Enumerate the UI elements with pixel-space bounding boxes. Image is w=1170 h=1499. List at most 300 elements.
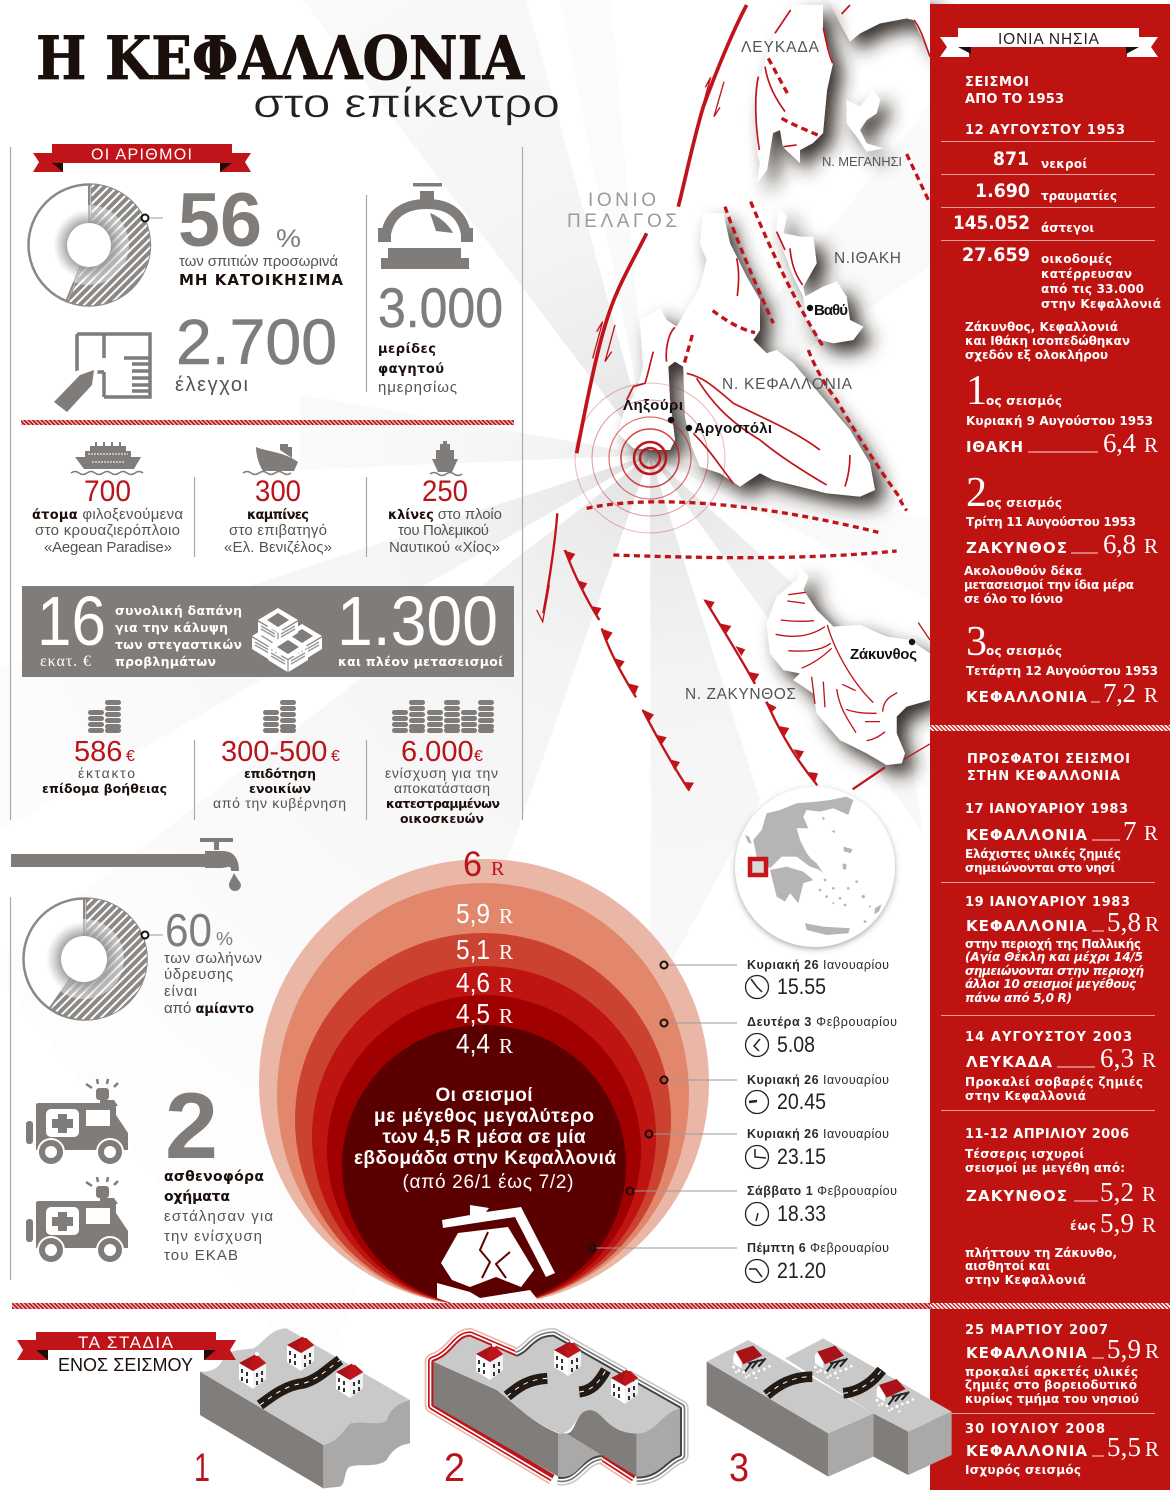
text: earthquakes since 1953: ΑΠΟ ΤΟ 1953 [965,92,1064,107]
chart caption: των 4,5 R μέσα σε μία [382,1127,586,1148]
chart caption: με μέγεθος μεγαλύτερο [374,1106,594,1127]
magnitude labels: R [499,1034,513,1058]
entry: 18.33 [746,1184,897,1226]
marker rings [588,962,668,1252]
road pieces [767,1370,882,1395]
entry: March 25 2007: προκαλεί αρκετές υλικές [965,1365,1138,1379]
entry: March 25 2007: κυρίως τμήμα του νησιού [965,1392,1139,1406]
entry: March 25 2007 [941,1323,1159,1414]
stat: 2700 inspections: 2.700 [176,306,337,378]
epicentre rings [575,383,725,533]
description: αποκατάσταση [394,780,490,796]
text: navy ship: Ναυτικού «Χίος» [389,539,500,556]
first earthquake: 1 [966,368,987,414]
third earthquake: ος σεισμός [986,644,1062,658]
chart caption: εβδομάδα στην Κεφαλλονιά [354,1148,616,1169]
entry: August 14 2003: ΛΕΥΚΑΔΑ [966,1053,1052,1071]
entry: April 2006 [965,1127,1156,1287]
entry: August 14 2003 [941,1030,1156,1110]
ribbon: stages of an earthquake [17,1332,236,1375]
second earthquake [964,470,1158,606]
red side panel [930,4,1170,1490]
third earthquake: 7,2 [1103,678,1136,708]
icon: money bundles [252,608,322,672]
entry: 21.20: Πέμπτη 6 Φεβρουαρίου [747,1241,889,1255]
text: navy ship: του Πολεμικού [398,522,489,539]
entry: April 2006: ΖΑΚΥΝΘΟΣ [966,1187,1067,1205]
ribbon: stages of an earthquake: ΕΝΟΣ ΣΕΙΣΜΟΥ [58,1355,193,1375]
third earthquake: ΚΕΦΑΛΛΟΝΙΑ [966,688,1087,706]
stat: 60%: από αμίαντο [164,1000,254,1017]
left block [707,1340,873,1477]
fault lines north [577,5,930,500]
description: από την κυβέρνηση [213,795,346,811]
magnitude labels: R [499,1004,513,1028]
entry: August 14 2003: R [1142,1048,1156,1072]
stage 1 block [200,1328,410,1488]
entry: August 14 2003: στην Κεφαλλονιά [965,1089,1086,1103]
entry: January 17 1983: Ελάχιστες υλικές ζημιές [965,847,1121,861]
description [385,765,500,826]
stat: 3000 meals: μερίδες [378,342,436,357]
entry: April 2006: έως [1070,1219,1096,1233]
red outline rings [433,1337,635,1477]
entry: January 17 1983: 7 [1123,816,1136,846]
text: total cost: των στεγαστικών [115,637,242,652]
sea label: ΠΕΛΑΓΟΣ [567,211,677,232]
third earthquake: R [1144,683,1158,707]
text: total cost: συνολική δαπάνη [115,603,242,618]
entry: July 30 2008 [965,1422,1159,1477]
text: total cost: προβλημάτων [115,654,216,669]
icon: floor plan and pencil [48,334,150,418]
entry: 15.55 [746,958,889,999]
description: έκτακτο [78,765,135,781]
magnitude labels: 5,1 [456,934,490,965]
icon: collapsed house [437,1205,555,1306]
second earthquake: ΖΑΚΥΝΘΟΣ [966,539,1067,557]
town labels: Ζάκυνθος [850,646,917,663]
entry: January 19 1983: R [1145,912,1159,936]
table: casualties 1953: νεκροί [1041,157,1087,171]
entry: January 19 1983: 5,8 [1107,907,1141,937]
houses [476,1343,503,1380]
town labels: Βαθύ [814,302,848,319]
text: navy ship: κλίνες στο πλοίο [388,506,502,523]
main heading: Η ΚΕΦΑΛΛΟΝΙΑ [36,24,525,94]
hatched divider panel [930,725,1170,731]
entry: July 30 2008: ΚΕΦΑΛΛΟΝΙΑ [966,1442,1087,1460]
thin faults [627,5,930,487]
text: earthquakes since 1953: 12 ΑΥΓΟΥΣΤΟΥ 1953 [965,123,1125,138]
magnitude labels: 5,9 [456,898,490,929]
table: casualties 1953 [941,142,1161,311]
table: casualties 1953: 1.690 [975,180,1030,202]
stat: 3000 meals: φαγητού [378,362,444,377]
donut chart: 60% [24,898,163,1020]
stage 3 block [707,1338,952,1477]
entry: July 30 2008: 5,5 [1107,1432,1141,1462]
entry: July 30 2008: R [1145,1437,1159,1461]
text: destruction: Ζάκυνθος, Κεφαλλονιά [965,320,1118,334]
third earthquake: Τετάρτη 12 Αυγούστου 1953 [966,664,1158,678]
entry: April 2006: 5,9 [1100,1208,1134,1238]
entry: March 25 2007: 5,9 [1107,1334,1141,1364]
text: destruction: σχεδόν εξ ολοκλήρου [965,348,1108,362]
entry: 5.08 [746,1015,897,1057]
text: cruise ship: «Aegean Paradise» [44,539,172,556]
entry: April 2006: στην Κεφαλλονιά [965,1273,1086,1287]
table: casualties 1953: κατέρρευσαν [1041,267,1132,281]
island: Meganisi [847,90,883,152]
table: casualties 1953: στην Κεφαλλονιά [1041,297,1161,311]
stat: 56%: % [276,225,301,253]
right block [785,1338,952,1475]
town labels [623,302,917,663]
entry: 18.33: 18.33 [777,1201,826,1226]
amount: € [474,748,483,765]
description: επιδότηση [244,766,316,781]
road pieces [507,1370,606,1396]
table: casualties 1953: οικοδομές [1041,252,1112,266]
amount: € [331,748,340,765]
stat: 2 ambulances [164,1073,273,1264]
entry: March 25 2007: ζημιές στο βορειοδυτικό [965,1378,1137,1392]
table: casualties 1953: από τις 33.000 [1041,282,1144,296]
table: casualties 1953: άστεγοι [1041,221,1094,235]
text: earthquakes since 1953: ΣΕΙΣΜΟΙ [965,75,1029,90]
island labels: Ν. ΜΕΓΑΝΗΣΙ [822,154,902,169]
table: casualties 1953: τραυματίες [1041,189,1117,203]
entry: January 17 1983: σημειώνονται στο νησί [965,861,1115,875]
second earthquake: Ακολουθούν δέκα [964,564,1082,578]
table: casualties 1953: 871 [993,148,1029,170]
entry: January 17 1983: R [1144,821,1158,845]
panel frame lines [10,147,522,1280]
thrust teeth [563,550,818,791]
locator square [750,859,766,875]
text: cruise ship [32,475,183,556]
entry: April 2006: 11-12 ΑΠΡΙΛΙΟΥ 2006 [965,1127,1129,1142]
icon: ambulance bottom [26,1177,128,1263]
entry: January 17 1983: ΚΕΦΑΛΛΟΝΙΑ [966,826,1087,844]
map labels [567,39,917,703]
entry: 21.20: 21.20 [777,1258,826,1283]
description: οικοσκευών [400,811,484,826]
stat: 60%: ύδρευσης [164,966,233,983]
heading: recent earthquakes [967,752,1130,784]
entry: 15.55: 15.55 [777,974,826,999]
ribbon: numbers: ΟΙ ΑΡΙΘΜΟΙ [91,146,192,164]
stat: 16 million: 16 [37,582,106,660]
ribbon: Ionian islands: ΙΟΝΙΑ ΝΗΣΙΑ [998,31,1100,48]
stat: 2 ambulances: του ΕΚΑΒ [164,1247,238,1264]
amount: 6.000 [401,736,474,768]
stat: 60% [164,904,262,1017]
stage 2 block [433,1337,680,1477]
grey outline rings [517,1337,680,1477]
icon: serving bell [378,183,473,269]
icon: ambulance top [26,1079,128,1165]
amount: € [126,748,135,765]
stat: 56%: ΜΗ ΚΑΤΟΙΚΗΣΙΜΑ [179,271,343,289]
fault segment at Zakynthos [853,767,885,789]
strike-slip arrow [537,585,549,622]
stat: 1300 aftershocks: και πλέον μετασεισμοί [338,654,503,669]
entry: January 19 1983: ΚΕΦΑΛΛΟΝΙΑ [966,917,1087,935]
entry: 5.08: Δευτέρα 3 Φεβρουαρίου [747,1015,897,1029]
text: cruise ship: στο κρουαζιερόπλοιο [35,522,180,539]
nested magnitude chart [259,845,709,1306]
icon: coins [392,700,494,733]
entry: August 14 2003: 14 ΑΥΓΟΥΣΤΟΥ 2003 [965,1030,1132,1045]
sunburst rays [0,0,930,1391]
first earthquake [966,368,1158,458]
stat: 60%: % [216,929,233,949]
description: επίδομα βοήθειας [42,781,167,796]
houses [239,1352,266,1389]
icon: navy ship [430,441,462,476]
text: cruise ship: άτομα φιλοξενούμενα [32,506,183,523]
text: earthquakes since 1953 [965,75,1125,138]
dashed offshore faults [587,500,907,558]
entry: April 2006: Τέσσερις ισχυροί [965,1147,1084,1161]
stat: 3000 meals: ημερησίως [378,379,457,396]
stat: 2 ambulances: εστάλησαν για [164,1208,273,1225]
text: ferry [224,475,332,556]
island: mainland coast [827,0,930,53]
first earthquake: ος σεισμός [986,394,1062,408]
entry: 18.33: Σάββατο 1 Φεβρουαρίου [747,1184,897,1198]
stat: 56%: των σπιτιών προσωρινά [179,253,338,270]
ribbon: Ionian islands [940,28,1158,57]
stage 2 number: 2 [444,1446,465,1490]
magnitude labels: R [499,940,513,964]
text: navy ship: 250 [422,475,468,508]
entry: 20.45: Κυριακή 26 Ιανουαρίου [747,1073,889,1087]
stage 1 number: 1 [194,1446,210,1490]
text: total cost: για την κάλυψη [115,620,228,635]
table: casualties 1953: 145.052 [953,212,1030,234]
stat: 2 ambulances: 2 [165,1073,218,1178]
icon: ferry [243,444,298,474]
island labels: Ν. ΖΑΚΥΝΘΟΣ [685,686,796,703]
entry: 15.55: Κυριακή 26 Ιανουαρίου [747,958,889,972]
description: ενοικίων [249,781,311,796]
chart caption: (από 26/1 έως 7/2) [402,1172,574,1193]
stat: 60%: είναι [164,983,197,1000]
first earthquake: R [1144,433,1158,457]
second earthquake: Τρίτη 11 Αυγούστου 1953 [966,515,1136,529]
stat: 2700 inspections: έλεγχοι [175,374,248,396]
entry: April 2006: σεισμοί με μεγέθη από: [965,1161,1125,1175]
magnitude labels: R [491,858,505,880]
stat: 56% [178,178,343,289]
second earthquake: ος σεισμός [986,496,1062,510]
fault arrows [593,77,724,362]
magnitude labels: R [499,973,513,997]
entry: 23.15: Κυριακή 26 Ιανουαρίου [747,1127,889,1141]
entry: August 14 2003: 6,3 [1100,1043,1134,1073]
subheading: στο επίκεντρο [253,80,560,126]
icon: cruise ship [71,442,143,474]
stat: 60%: των σωλήνων [164,950,262,967]
icon: water pipe and tap [11,838,241,891]
entry: January 19 1983: σημειώνονται στην περιοχή [965,964,1144,978]
text: total cost [115,603,242,669]
magnitude labels [456,845,513,1059]
magnitude labels: 4,4 [456,1028,490,1059]
entry: July 30 2008: Ισχυρός σεισμός [965,1463,1081,1477]
amount: 586 [74,736,122,768]
text: cruise ship: 700 [84,475,131,508]
hatched divider panel lower [930,1303,1170,1309]
thrust faults [565,550,817,791]
aid column 2 [213,700,346,811]
entry: 5.08: 5.08 [777,1032,815,1057]
sea label [567,190,677,232]
entry: 20.45 [746,1073,889,1114]
amount: 300-500 [221,736,327,768]
earthquake markers and times [588,958,897,1283]
second earthquake: μετασεισμοί την ίδια μέρα [964,578,1134,592]
entry: 23.15 [746,1127,889,1169]
entry: April 2006: πλήττουν τη Ζάκυνθο, [965,1246,1117,1260]
text: ferry: καμπίνες [247,508,309,523]
text: destruction: και Ιθάκη ισοπεδώθηκαν [965,334,1130,348]
entry: January 19 1983 [941,895,1159,1016]
island labels: Ν. ΚΕΦΑΛΛΟΝΙΑ [722,376,853,393]
entry: April 2006: αισθητοί και [965,1259,1050,1273]
text: ferry: 300 [255,475,301,508]
first earthquake: 6,4 [1103,428,1136,458]
stat: 1300 aftershocks: 1.300 [337,582,498,660]
entry: January 19 1983: πάνω από 5,0 R) [965,991,1072,1005]
text: ferry: «Ελ. Βενιζέλος» [224,539,332,556]
stat: 3000 meals [378,276,503,396]
Greece shapes [745,797,882,935]
first earthquake: Κυριακή 9 Αυγούστου 1953 [966,414,1153,428]
strike-slip fault [543,513,557,613]
entry: January 19 1983: (Αγία Θέκλη και μέχρι 14/5 [965,950,1143,964]
dashed faults [684,58,930,500]
hatched divider lower [12,1303,930,1309]
stat: 2 ambulances: ασθενοφόρα [164,1169,264,1185]
stat: 3000 meals: 3.000 [378,276,503,339]
second earthquake: σε όλο το Ιόνιο [964,592,1063,606]
aid column 1 [42,700,167,796]
icon: coins [88,700,121,733]
entry: March 25 2007: R [1145,1339,1159,1363]
entry: January 19 1983: άλλοι 10 σεισμοί μεγέθους [965,977,1137,991]
entry: 20.45: 20.45 [777,1089,826,1114]
stat: 2 ambulances: οχήματα [164,1189,230,1205]
second earthquake: 6,8 [1103,529,1136,559]
hatched divider [21,420,514,425]
locator globe of Greece [735,787,895,947]
donut chart: 56% [28,184,163,306]
Zakynthos faults [776,592,930,759]
block faces [433,1337,680,1477]
heading: recent earthquakes: ΠΡΟΣΦΑΤΟΙ ΣΕΙΣΜΟΙ [967,752,1130,767]
chart caption [354,1085,616,1193]
panel: Ionian islands history [930,28,1170,1477]
table: casualties 1953: 27.659 [962,244,1030,266]
second earthquake: R [1144,534,1158,558]
entry: April 2006: 5,2 [1100,1177,1134,1207]
map: Ionian islands [618,0,930,765]
entry: July 30 2008: 30 ΙΟΥΛΙΟΥ 2008 [965,1422,1105,1437]
description: ενίσχυση για την [385,765,498,781]
chart caption: Οι σεισμοί [436,1085,532,1106]
stage 3 number: 3 [729,1446,749,1490]
fault lines south [537,500,930,791]
globe [735,787,895,947]
entry: March 25 2007: ΚΕΦΑΛΛΟΝΙΑ [966,1344,1087,1362]
second earthquake: 2 [966,470,987,516]
ribbon: numbers [33,144,251,172]
entry: January 17 1983 [941,802,1158,882]
town labels: Αργοστόλι [694,420,772,437]
block faces [200,1328,410,1488]
marker lines [596,965,737,1248]
island labels: ΛΕΥΚΑΔΑ [741,39,820,56]
island: Lefkada [755,5,833,183]
grey stats panel [22,582,514,677]
text: destruction [965,320,1130,362]
ribbon: stages of an earthquake: ΤΑ ΣΤΑΔΙΑ [78,1333,174,1352]
text: navy ship [388,475,502,556]
entry: April 2006: R [1142,1182,1156,1206]
entry: April 2006: R [1142,1213,1156,1237]
magnitude labels: 6 [463,845,482,884]
description [213,766,346,811]
entry: January 17 1983: 17 ΙΑΝΟΥΑΡΙΟΥ 1983 [965,802,1128,817]
magnitude layers [259,859,709,1306]
main fault [577,5,747,453]
text: ferry: στο επιβατηγό [229,522,327,539]
island: Zakynthos [767,567,930,765]
third earthquake: 3 [966,619,987,665]
damaged houses [732,1346,914,1412]
magnitude labels: 4,5 [456,998,490,1029]
island labels: Ν.ΙΘΑΚΗ [834,250,901,267]
magnitude labels: R [499,904,513,928]
entry: January 19 1983: στην περιοχή της Παλλικής [965,937,1141,951]
third earthquake [966,619,1158,708]
description: κατεστραμμένων [386,796,500,811]
title [36,24,560,126]
stat: 2 ambulances: την ενίσχυση [164,1228,262,1245]
entry: March 25 2007: 25 ΜΑΡΤΙΟΥ 2007 [965,1323,1108,1338]
stat: 60%: 60 [165,904,212,956]
magnitude labels: 4,6 [456,967,490,998]
entry: August 14 2003: Προκαλεί σοβαρές ζημιές [965,1075,1143,1089]
stat: 16 million: εκατ. € [40,653,91,670]
stat: 56%: 56 [178,178,262,263]
island: Ithaki [777,207,863,343]
entry: January 19 1983: 19 ΙΑΝΟΥΑΡΙΟΥ 1983 [965,895,1130,910]
sea label: ΙΟΝΙΟ [588,190,656,211]
heading: recent earthquakes: ΣΤΗΝ ΚΕΦΑΛΛΟΝΙΑ [967,769,1120,784]
entry: 21.20 [746,1241,889,1283]
description [42,765,167,796]
icon: coins [263,700,296,733]
town labels: Ληξούρι [623,397,683,414]
island labels [685,39,902,703]
island: Kefalonia [618,213,875,497]
first earthquake: ΙΘΑΚΗ [966,438,1023,456]
